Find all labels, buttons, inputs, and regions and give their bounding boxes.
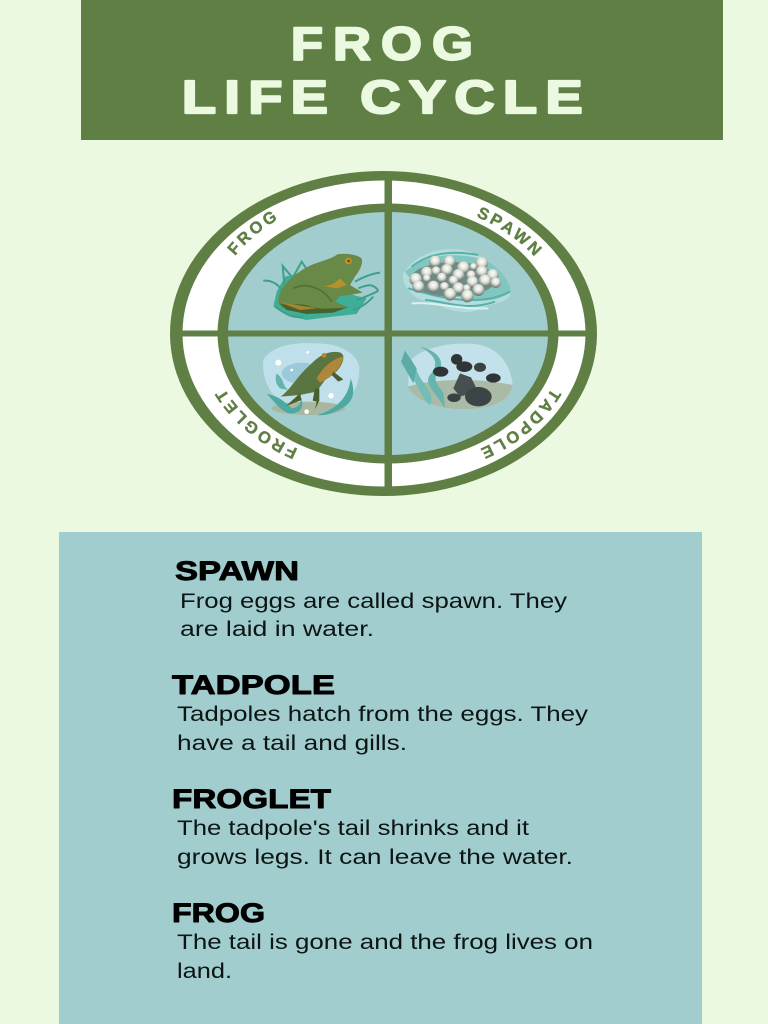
egg cluster [409, 256, 501, 302]
icon: adult frog on grass [263, 254, 380, 320]
stage text: froglet [177, 816, 573, 869]
icon: frog spawn eggs [403, 249, 511, 312]
stage text: spawn [180, 589, 567, 641]
stage heading: TADPOLE: TADPOLE [172, 670, 335, 700]
stage heading: SPAWN: SPAWN [175, 556, 299, 586]
stage text: frog [177, 930, 593, 983]
stage text: froglet: The tadpole's tail shrinks and it [177, 816, 529, 840]
stage text: frog: land. [177, 959, 232, 983]
stage heading: FROGLET: FROGLET [172, 784, 331, 814]
ring label: TADPOLE: TADPOLE [480, 391, 562, 459]
title line: FROG: FROG [291, 18, 483, 70]
stage text: tadpole [177, 702, 588, 755]
stage text: spawn: are laid in water. [180, 617, 374, 641]
stage text: spawn: Frog eggs are called spawn. They [180, 589, 567, 613]
stage heading: FROG: FROG [172, 898, 265, 928]
title line: LIFE CYCLE: LIFE CYCLE [182, 71, 591, 123]
stage text: froglet: grows legs. It can leave the water. [177, 845, 573, 869]
ring label: SPAWN: SPAWN [478, 208, 542, 256]
stage text: tadpole: have a tail and gills. [177, 731, 407, 755]
life cycle wheel diagram [170, 171, 597, 496]
icon: froglet swimming [263, 343, 359, 415]
title banner [81, 0, 723, 140]
stage text: tadpole: Tadpoles hatch from the eggs. They [177, 702, 588, 726]
ring label: FROGLET: FROGLET [214, 391, 298, 460]
ring label: FROG: FROG [226, 212, 276, 256]
stage text: frog: The tail is gone and the frog lives on [177, 930, 593, 954]
text panel: life cycle stages [59, 532, 702, 1024]
icon: tadpoles among rocks and weed [401, 344, 513, 409]
